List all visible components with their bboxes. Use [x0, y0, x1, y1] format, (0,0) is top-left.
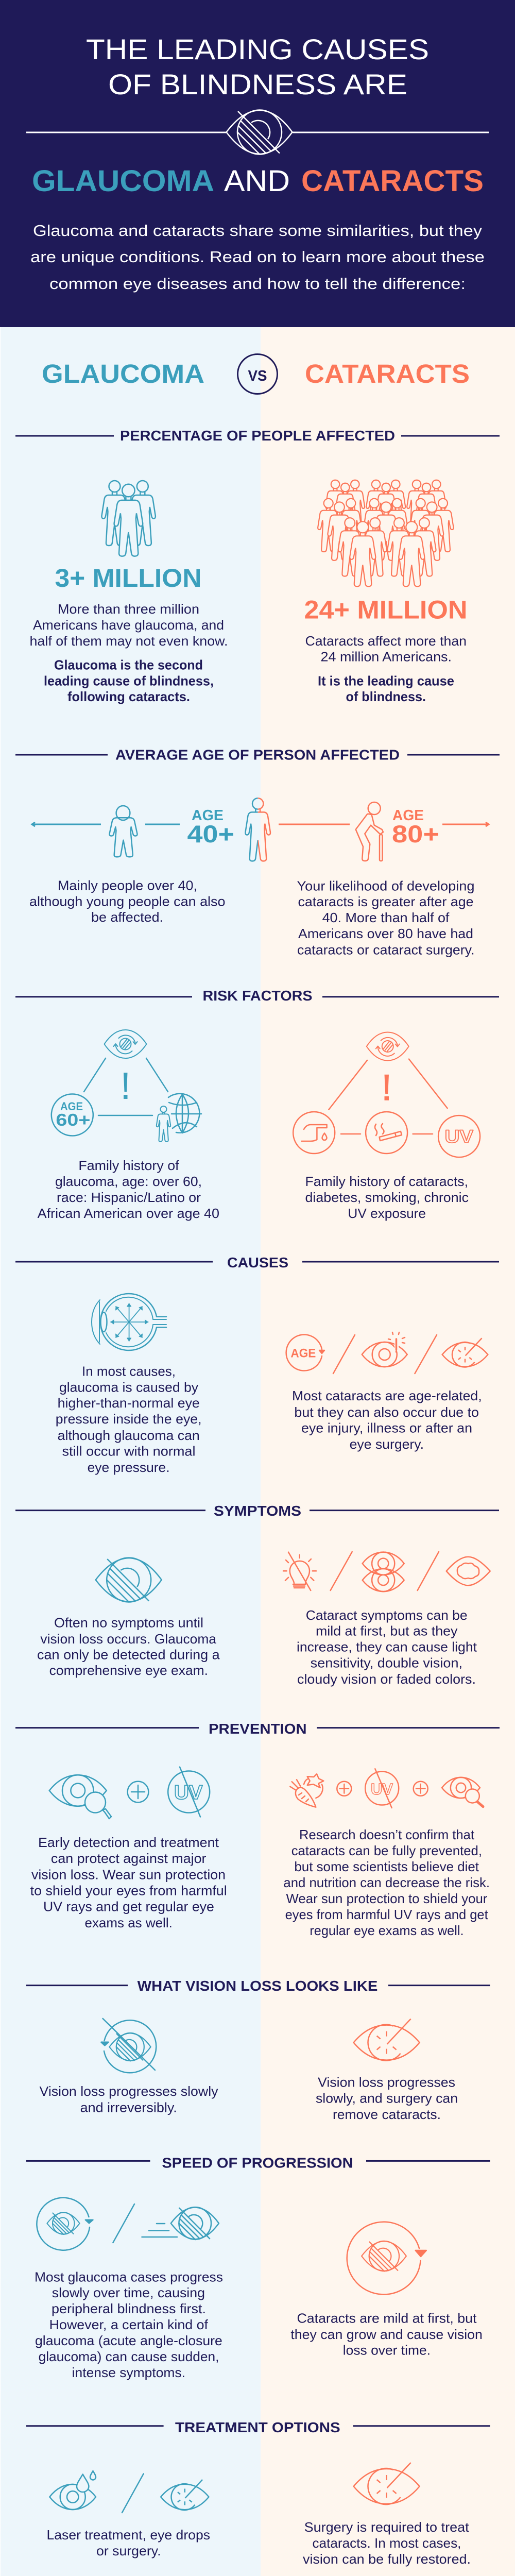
text: prevention glaucoma [30, 1835, 227, 1930]
icon: no UV [168, 1767, 210, 1817]
description: following cataracts. [67, 689, 190, 704]
text: age cataracts: Your likelihood of developing [297, 878, 475, 894]
versus row [42, 354, 470, 394]
heading: percentage of people affected: PERCENTAGE OF PEOPLE AFFECTED [120, 428, 395, 444]
label: age 40+: AGE [192, 807, 224, 824]
divider: slash [418, 1552, 439, 1590]
icon: eye surgery [354, 2463, 420, 2504]
panel: prevention glaucoma [30, 1767, 227, 1930]
icon: older person with cane [356, 802, 383, 861]
text: vision loss cataracts [316, 2074, 458, 2122]
subtitle: CATARACTS [301, 164, 484, 198]
text: causes glaucoma: eye pressure. [88, 1460, 170, 1475]
versus row: CATARACTS [305, 359, 470, 388]
panel: percentage cataracts [304, 480, 468, 704]
text: prevention cataracts: and nutrition can decrease the risk. [283, 1875, 490, 1890]
text: prevention glaucoma: to shield your eyes from harmful [30, 1883, 227, 1899]
icon: risk triangle glaucoma [52, 1030, 201, 1142]
icon: plus [337, 1782, 351, 1796]
text: treatment cataracts: cataracts. In most cases, [312, 2535, 461, 2551]
text: symptoms cataracts: mild at first, but as they [316, 1623, 457, 1638]
text: prevention glaucoma: vision loss. Wear sun protection [31, 1867, 226, 1883]
text: speed glaucoma: peripheral blindness first. [52, 2301, 206, 2316]
heading: causes: CAUSES [227, 1255, 288, 1270]
description [30, 601, 228, 704]
icon: two-tone person [245, 798, 270, 861]
heading: what vision loss looks like: WHAT VISION LOSS LOOKS LIKE [138, 1978, 377, 1994]
text: risk glaucoma [38, 1158, 219, 1221]
text: prevention glaucoma: can protect against major [51, 1851, 207, 1866]
text: risk glaucoma: Family history of [78, 1158, 179, 1173]
text: symptoms glaucoma [37, 1615, 220, 1678]
text: prevention glaucoma: Early detection and treatment [38, 1835, 219, 1850]
text: speed glaucoma: glaucoma) can cause sudden, [39, 2349, 219, 2364]
icon: age 60+ [52, 1094, 93, 1136]
description: More than three million [58, 601, 199, 617]
text: symptoms glaucoma: Often no symptoms until [54, 1615, 203, 1631]
description: leading cause of blindness, [44, 673, 214, 689]
intro paragraph [30, 222, 485, 293]
text: prevention glaucoma: exams as well. [84, 1915, 173, 1930]
icon: age 60+: 60+ [56, 1110, 90, 1129]
text: treatment glaucoma: or surgery. [96, 2543, 161, 2558]
mark: exclamation [384, 1075, 389, 1100]
description: Glaucoma is the second [54, 657, 203, 673]
subtitle: GLAUCOMA [32, 164, 214, 198]
text: prevention cataracts: Wear sun protection to shield your [286, 1891, 488, 1906]
icon: eye exam [49, 1775, 111, 1819]
title [86, 33, 429, 100]
icon: younger person [109, 806, 137, 857]
text: vision loss glaucoma: and irreversibly. [80, 2100, 177, 2115]
text: vision loss cataracts: remove cataracts. [333, 2107, 441, 2122]
description: It is the leading cause [318, 673, 454, 689]
icon: plus [128, 1782, 148, 1802]
icon: crossed eye divider [26, 110, 489, 155]
panel: percentage glaucoma [30, 481, 228, 704]
icon: eye surgery [442, 1338, 488, 1367]
text: prevention cataracts: regular eye exams as well. [310, 1923, 464, 1938]
description: Americans have glaucoma, and [33, 617, 224, 633]
arrow: cataracts age line [279, 822, 489, 826]
icon: smoking [366, 1112, 407, 1154]
text: risk cataracts: UV exposure [348, 1206, 426, 1221]
panel: risk cataracts [293, 1032, 480, 1221]
title: THE LEADING CAUSES [86, 33, 429, 65]
intro paragraph: common eye diseases and how to tell the difference: [49, 275, 466, 293]
heading: average age: AVERAGE AGE OF PERSON AFFECTED [115, 747, 400, 762]
icon: age circle: AGE [290, 1347, 316, 1361]
divider: slash [113, 2204, 134, 2243]
icon: no UV: UV [371, 1780, 393, 1798]
text: causes cataracts: Most cataracts are age-related, [292, 1388, 482, 1403]
stat: 24+ million: 24+ MILLION [304, 596, 468, 624]
heading: risk factors: RISK FACTORS [203, 988, 312, 1004]
icon: healthy food [290, 1774, 323, 1807]
panel: prevention cataracts [283, 1769, 490, 1938]
versus row: GLAUCOMA [42, 359, 204, 388]
title: OF BLINDNESS ARE [108, 68, 407, 100]
text: age glaucoma: be affected. [91, 909, 163, 925]
text: causes glaucoma: pressure inside the eye, [56, 1411, 202, 1427]
text: symptoms cataracts: sensitivity, double vision, [311, 1655, 462, 1671]
icon: vision loss circle [101, 2019, 156, 2073]
icon: plus [414, 1782, 428, 1796]
description: half of them may not even know. [30, 633, 228, 649]
divider: slash [331, 1552, 352, 1590]
icon: double vision [363, 1552, 404, 1591]
icon: diabetes [293, 1112, 335, 1154]
icon: fast progression [142, 2207, 219, 2240]
icon: eye injury [362, 1332, 407, 1367]
text: prevention cataracts [283, 1827, 490, 1938]
text: causes glaucoma: higher-than-normal eye [58, 1395, 200, 1411]
text: age cataracts: Americans over 80 have had [298, 926, 473, 941]
divider: slash [122, 2474, 144, 2513]
panel: symptoms glaucoma [37, 1558, 220, 1678]
text: causes cataracts [292, 1388, 482, 1452]
icon: heart of people [318, 480, 454, 586]
text: age cataracts [297, 878, 475, 957]
text: speed cataracts: loss over time. [343, 2342, 431, 2358]
text: treatment glaucoma [46, 2527, 210, 2558]
text: symptoms cataracts: increase, they can cause light [297, 1639, 477, 1655]
icon: slow progression [347, 2222, 426, 2294]
panel: vision loss cataracts [316, 2019, 458, 2122]
icon: age 60+: AGE [60, 1100, 83, 1113]
text: prevention cataracts: Research doesn’t confirm that [299, 1827, 475, 1842]
panel: risk glaucoma [38, 1030, 219, 1221]
icon: UV [438, 1115, 480, 1157]
text: age glaucoma [29, 878, 226, 925]
icon: cloudy eye [447, 1557, 490, 1585]
icon: crossed eye [96, 1558, 162, 1602]
icon: risk triangle cataracts [293, 1032, 480, 1157]
text: risk cataracts [305, 1174, 469, 1221]
subtitle: AND [224, 164, 290, 198]
text: causes cataracts: eye surgery. [350, 1436, 424, 1452]
label: age 80+: AGE [392, 807, 424, 824]
text: speed cataracts [290, 2311, 483, 2358]
mark: exclamation [124, 1073, 128, 1099]
subtitle [32, 164, 484, 198]
text: symptoms cataracts [297, 1607, 477, 1687]
text: speed cataracts: Cataracts are mild at first, but [297, 2311, 477, 2326]
icon: eye exam [442, 1777, 483, 1807]
arrow: glaucoma age line [32, 822, 180, 826]
text: symptoms cataracts: cloudy vision or faded colors. [297, 1671, 476, 1687]
panel: speed glaucoma [35, 2198, 223, 2380]
panel: symptoms cataracts [283, 1552, 490, 1687]
text: symptoms glaucoma: comprehensive eye exam. [49, 1663, 208, 1678]
text: causes glaucoma: In most causes, [82, 1363, 176, 1379]
icon: slow progression [37, 2198, 93, 2250]
intro paragraph: Glaucoma and cataracts share some similarities, but they [33, 222, 483, 240]
description: of blindness. [346, 689, 426, 704]
text: risk glaucoma: race: Hispanic/Latino or [57, 1190, 201, 1205]
panel: header [0, 0, 515, 327]
divider: slash [333, 1335, 355, 1374]
intro paragraph: are unique conditions. Read on to learn more about these [30, 248, 485, 266]
icon: light sensitivity bulb [283, 1552, 316, 1590]
icon: eye drops [49, 2471, 96, 2510]
text: age glaucoma: although young people can also [29, 894, 226, 909]
panel: speed cataracts [290, 2222, 483, 2358]
text: speed glaucoma: However, a certain kind of [49, 2317, 209, 2332]
text: vision loss glaucoma [39, 2083, 218, 2115]
text: causes cataracts: but they can also occur due to [294, 1404, 479, 1420]
text: speed glaucoma: Most glaucoma cases progress [35, 2269, 223, 2285]
panel: vision loss glaucoma [39, 2019, 218, 2115]
text: treatment glaucoma: Laser treatment, eye drops [46, 2527, 210, 2543]
icon: three people [101, 481, 156, 556]
text: treatment cataracts: vision can be fully restored. [303, 2551, 471, 2567]
icon: eye laser [161, 2480, 209, 2510]
panel: causes cataracts [286, 1332, 488, 1452]
text: symptoms glaucoma: can only be detected during a [37, 1647, 220, 1662]
icon: no UV [365, 1769, 399, 1808]
icon: eye surgery [354, 2019, 420, 2061]
chart: age timeline [32, 798, 489, 861]
heading: treatment options: TREATMENT OPTIONS [175, 2419, 340, 2435]
text: speed cataracts: they can grow and cause vision [290, 2327, 483, 2342]
panel: treatment glaucoma [46, 2471, 210, 2558]
text: risk glaucoma: glaucoma, age: over 60, [55, 1174, 202, 1189]
text: prevention cataracts: eyes from harmful UV rays and get [285, 1907, 488, 1922]
label: age 40+: 40+ [187, 820, 234, 848]
stat: 3+ million: 3+ MILLION [55, 564, 202, 592]
text: causes cataracts: eye injury, illness or after an [301, 1420, 472, 1436]
text: causes glaucoma: still occur with normal [62, 1444, 196, 1459]
text: vision loss cataracts: slowly, and surgery can [316, 2091, 458, 2106]
description: 24 million Americans. [320, 649, 452, 665]
text: prevention cataracts: but some scientists believe diet [294, 1859, 479, 1874]
text: vision loss cataracts: Vision loss progresses [318, 2074, 455, 2090]
text: prevention cataracts: cataracts can be fully prevented, [291, 1843, 482, 1858]
divider: slash [415, 1335, 437, 1374]
description [305, 633, 467, 704]
text: symptoms glaucoma: vision loss occurs. Glaucoma [40, 1631, 217, 1647]
text: risk cataracts: diabetes, smoking, chronic [305, 1190, 469, 1205]
text: age glaucoma: Mainly people over 40, [58, 878, 197, 893]
icon: UV: UV [445, 1127, 474, 1147]
text: risk glaucoma: African American over age 40 [38, 1206, 219, 1221]
text: speed glaucoma: intense symptoms. [72, 2365, 185, 2380]
icon: age circle [286, 1334, 324, 1370]
text: age cataracts: cataracts or cataract surgery. [297, 942, 475, 957]
heading: speed of progression: SPEED OF PROGRESSION [162, 2155, 353, 2171]
panel: treatment cataracts [303, 2463, 471, 2567]
panel: causes glaucoma [56, 1294, 202, 1475]
icon: eyeball with pressure arrows [92, 1294, 166, 1350]
label: age 40+ [187, 807, 234, 848]
text: symptoms cataracts: Cataract symptoms can be [306, 1607, 468, 1623]
versus row: VS [248, 368, 267, 384]
icon: no UV: UV [174, 1782, 203, 1804]
text: risk cataracts: Family history of cataracts, [305, 1174, 468, 1189]
text: causes glaucoma: although glaucoma can [58, 1428, 200, 1443]
description: Cataracts affect more than [305, 633, 467, 649]
heading: prevention: PREVENTION [209, 1721, 307, 1737]
text: speed glaucoma: slowly over time, causing [52, 2285, 205, 2300]
heading: symptoms: SYMPTOMS [214, 1503, 301, 1519]
text: prevention glaucoma: UV rays and get regular eye [43, 1899, 214, 1914]
label: age 80+: 80+ [392, 820, 439, 848]
text: speed glaucoma: glaucoma (acute angle-closure [35, 2333, 222, 2348]
text: treatment cataracts: Surgery is required to treat [304, 2519, 470, 2535]
text: vision loss glaucoma: Vision loss progresses slowly [39, 2083, 218, 2099]
label: age 80+ [392, 807, 439, 848]
text: age cataracts: 40. More than half of [322, 910, 450, 925]
text: causes glaucoma [56, 1363, 202, 1475]
text: speed glaucoma [35, 2269, 223, 2380]
text: causes glaucoma: glaucoma is caused by [59, 1380, 198, 1395]
text: treatment cataracts [303, 2519, 471, 2567]
text: age cataracts: cataracts is greater after age [298, 894, 474, 909]
icon: person and globe [157, 1094, 201, 1142]
